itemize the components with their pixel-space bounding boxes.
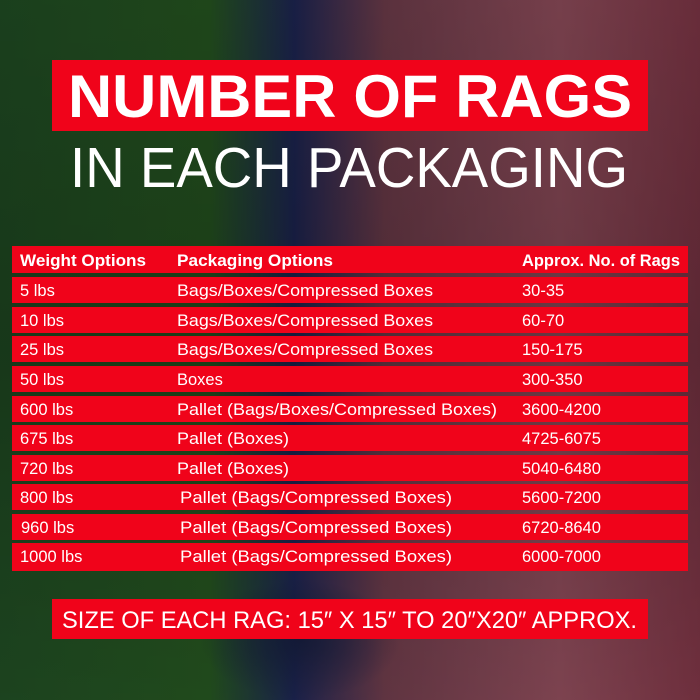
table header: Packaging Options (177, 252, 333, 270)
table rows: 300-350 (522, 371, 583, 389)
table rows: Bags/Boxes/Compressed Boxes (177, 282, 433, 300)
table rows: 5 lbs (20, 282, 55, 300)
table header: Approx. No. of Rags (522, 252, 680, 270)
table rows: 60-70 (522, 312, 564, 330)
table rows: 6720-8640 (522, 519, 601, 537)
table rows: 30-35 (522, 282, 564, 300)
table rows: 6000-7000 (522, 548, 601, 566)
table rows: 25 lbs (20, 341, 64, 359)
table rows: 675 lbs (20, 430, 73, 448)
table rows: Pallet (Bags/Compressed Boxes) (180, 548, 452, 566)
table (12, 246, 688, 571)
table rows: 150-175 (522, 341, 583, 359)
table rows: 600 lbs (20, 401, 73, 419)
table rows: Pallet (Boxes) (177, 430, 289, 448)
table rows (12, 277, 688, 571)
table rows: 10 lbs (20, 312, 64, 330)
table rows: Bags/Boxes/Compressed Boxes (177, 312, 433, 330)
footer note: SIZE OF EACH RAG: 15″ X 15″ TO 20″X20″ APPROX. (62, 607, 637, 634)
table rows: 5040-6480 (522, 460, 601, 478)
table rows: 720 lbs (20, 460, 73, 478)
table rows: Pallet (Boxes) (177, 460, 289, 478)
table rows: 1000 lbs (20, 548, 82, 566)
table rows: Pallet (Bags/Compressed Boxes) (180, 519, 452, 537)
footer note (52, 599, 648, 639)
table rows: 5600-7200 (522, 489, 601, 507)
table header: Weight Options (20, 252, 146, 270)
table rows: 4725-6075 (522, 430, 601, 448)
title: NUMBER OF RAGS (68, 63, 632, 130)
table rows: 50 lbs (20, 371, 64, 389)
table rows: Boxes (177, 371, 223, 389)
table rows: Bags/Boxes/Compressed Boxes (177, 341, 433, 359)
table header (12, 246, 688, 273)
table rows: 3600-4200 (522, 401, 601, 419)
subtitle: IN EACH PACKAGING (70, 136, 628, 200)
table rows: Pallet (Bags/Compressed Boxes) (180, 489, 452, 507)
table rows: 800 lbs (20, 489, 73, 507)
table rows: Pallet (Bags/Boxes/Compressed Boxes) (177, 401, 497, 419)
table rows: 960 lbs (21, 519, 74, 537)
